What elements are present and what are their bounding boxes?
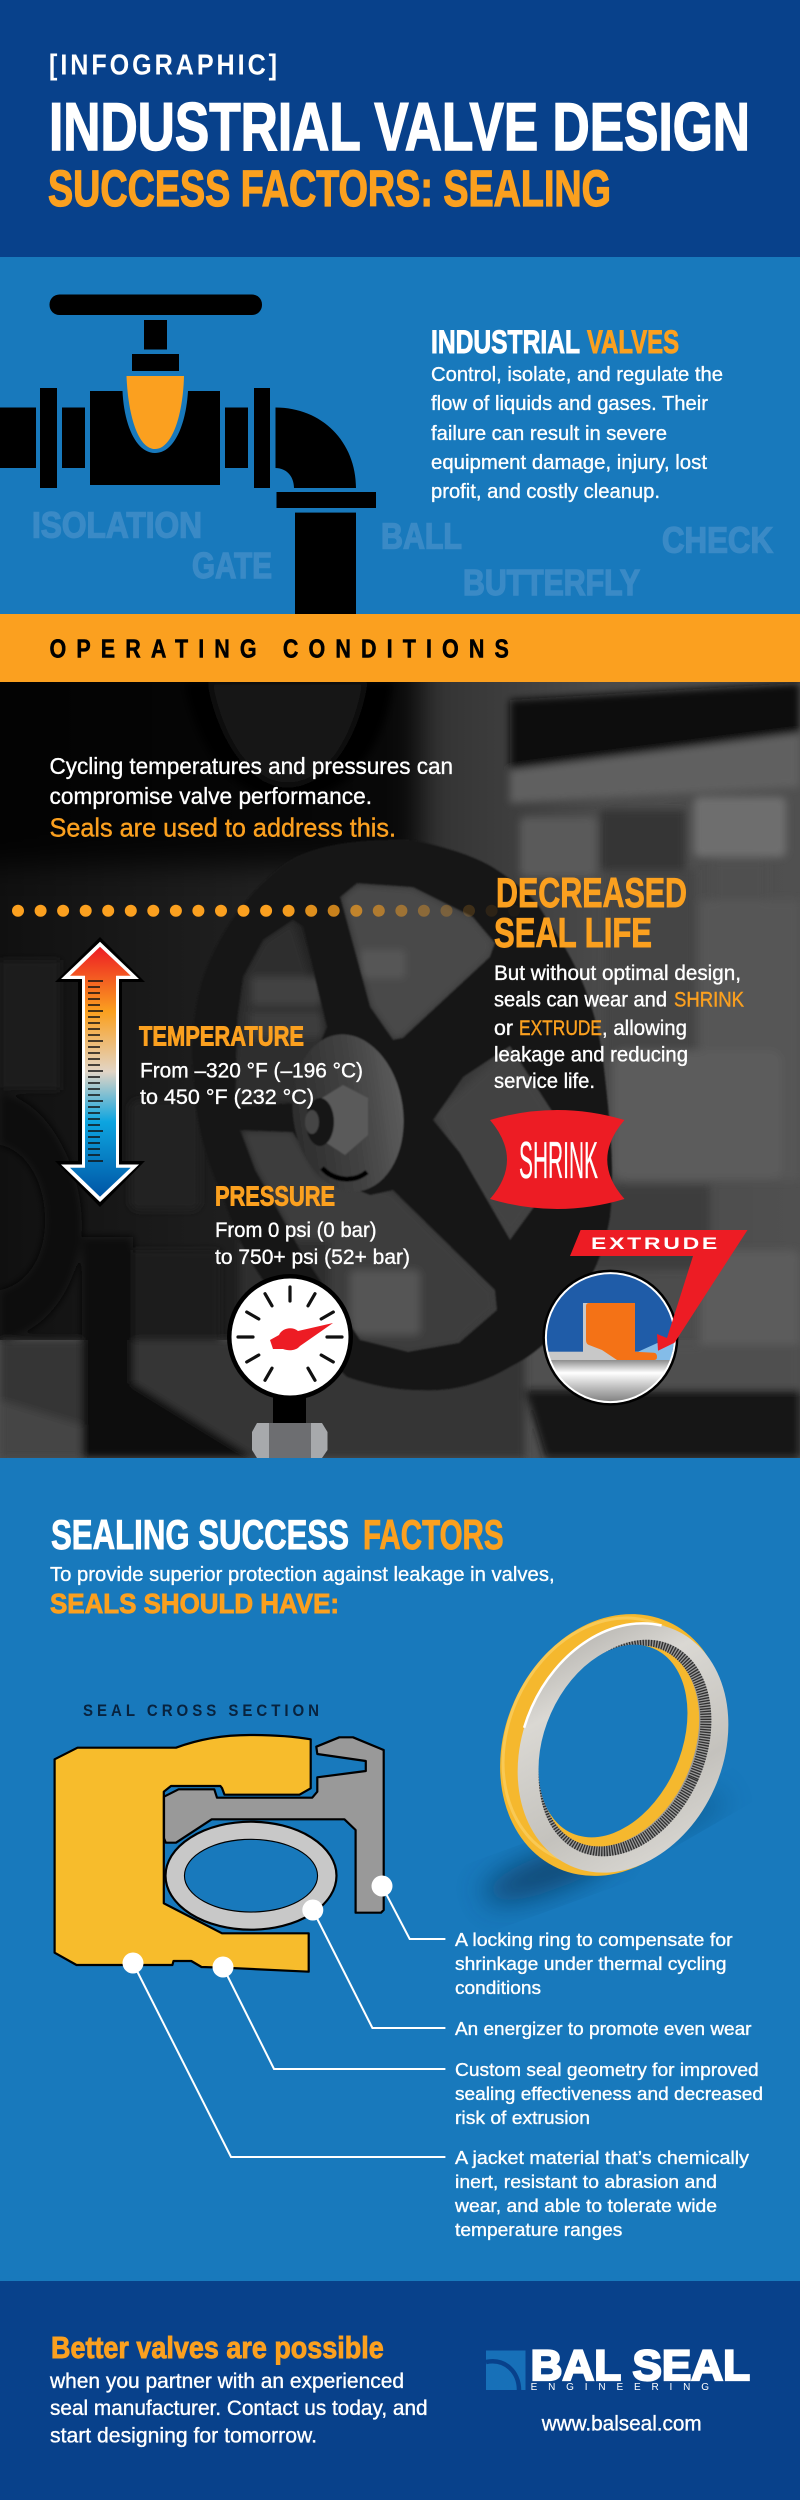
footer text: when you partner with an experienced: [49, 2370, 404, 2393]
panel: operating conditions photo: [0, 650, 800, 1458]
text: pressure: [215, 1180, 410, 1269]
image: seal ring: [459, 1578, 767, 1913]
text: cycling temperatures: compromise valve performance.: [50, 783, 372, 809]
text: seal geometry: risk of extrusion: [455, 2107, 590, 2128]
text: locking ring: conditions: [455, 1977, 541, 1998]
text: pressure: PRESSURE: [215, 1180, 335, 1212]
text: valve description: Control, isolate, and regulate the: [431, 363, 723, 386]
text: decreased seal life description: or: [494, 1017, 513, 1040]
faded valve type words: BALL: [381, 516, 462, 557]
faded valve type words: GATE: [192, 545, 272, 586]
heading: decreased seal life: [494, 869, 687, 956]
heading: decreased seal life: SEAL LIFE: [494, 909, 652, 956]
logo: Bal Seal Engineering: BAL SEAL: [531, 2342, 750, 2390]
top gauge: [209, 692, 306, 787]
heading: sealing success factors: SEALING SUCCESS: [51, 1511, 349, 1558]
text: jacket material: wear, and able to tolerate wide: [454, 2195, 717, 2216]
icon: shrink badge: SHRINK: [519, 1132, 598, 1190]
footer heading: Better valves are possible: [51, 2330, 384, 2365]
heading: seal cross section: SEAL CROSS SECTION: [83, 1701, 323, 1720]
text: seal geometry: sealing effectiveness and decreased: [455, 2083, 763, 2104]
jacket: [55, 1735, 311, 1972]
heading: industrial valves: INDUSTRIAL: [431, 324, 580, 360]
text: temperature: From –320 °F (–196 °C): [140, 1059, 363, 1082]
text: decreased seal life description: [494, 962, 744, 1093]
left background details: [0, 960, 60, 1090]
faded valve type words: CHECK: [662, 520, 773, 561]
logo: Bal Seal Engineering: ENGINEERING: [531, 2382, 718, 2393]
banner: operating conditions: OPERATING CONDITIONS: [50, 636, 519, 664]
hub disc: [292, 1034, 404, 1192]
panel: sealing success factors: [0, 1458, 800, 2281]
locking ring: [164, 1737, 384, 1913]
text: jacket material: [454, 2147, 750, 2240]
text: decreased seal life description: leakage and reducing: [494, 1044, 688, 1067]
text: jacket material: temperature ranges: [455, 2219, 622, 2240]
text: jacket material: inert, resistant to abrasion and: [455, 2171, 717, 2192]
handwheel silhouette: [192, 840, 612, 1390]
icon: black valve with orange plug: [0, 294, 376, 615]
text: pressure: to 750+ psi (52+ bar): [215, 1246, 410, 1269]
text: section intro: [50, 1563, 555, 1619]
subtitle: SUCCESS FACTORS: SEALING: [48, 160, 611, 217]
text: decreased seal life description: seals can wear and: [494, 989, 667, 1012]
text: seal geometry: [455, 2059, 763, 2128]
text: valve description: [431, 363, 723, 503]
icon: shrink badge: [490, 1110, 624, 1209]
text: energizer: An energizer to promote even wear: [455, 2018, 752, 2039]
text: decreased seal life description: EXTRUDE: [519, 1017, 602, 1040]
diagram: seal cross section: [55, 1735, 384, 1972]
panel: footer: [0, 2281, 800, 2500]
footer text: seal manufacturer. Contact us today, and: [50, 2397, 428, 2420]
heading: decreased seal life: DECREASED: [496, 869, 687, 916]
energizer: [166, 1822, 336, 1930]
text: valve description: profit, and costly cleanup.: [431, 480, 660, 503]
text: temperature: [139, 1020, 363, 1109]
text: decreased seal life description: But without optimal design,: [494, 962, 741, 985]
header band: [0, 0, 800, 257]
right side valve body: [510, 683, 800, 770]
text: temperature: TEMPERATURE: [139, 1020, 304, 1052]
text: cycling temperatures: Cycling temperatures and pressures can: [50, 753, 453, 779]
text: jacket material: A jacket material that’s chemically: [455, 2147, 750, 2168]
text: valve description: failure can result in severe: [431, 422, 667, 445]
faded valve type words: [32, 504, 773, 603]
panel: industrial valves: [0, 257, 800, 615]
header kicker: [INFOGRAPHIC]: [49, 50, 280, 82]
footer website: www.balseal.com: [541, 2413, 702, 2436]
faded valve type words: ISOLATION: [32, 504, 202, 546]
text: decreased seal life description: SHRINK: [674, 989, 744, 1012]
text: pressure: From 0 psi (0 bar): [215, 1219, 376, 1242]
text: seal geometry: Custom seal geometry for improved: [455, 2059, 759, 2080]
callout: extrude arrow: [570, 1230, 748, 1351]
floor: [0, 1340, 525, 1458]
text: section intro: SEALS SHOULD HAVE:: [50, 1588, 339, 1619]
text: valve description: flow of liquids and gases. Their: [431, 392, 708, 415]
leader lines and callout dots: [122, 1876, 445, 2157]
footer text: start designing for tomorrow.: [50, 2425, 317, 2448]
text: valve description: equipment damage, injury, lost: [431, 451, 707, 474]
icon: pressure gauge: [227, 1274, 353, 1458]
text: cycling temperatures: [50, 753, 453, 843]
icon: extrude circle: [540, 1270, 680, 1406]
text: decreased seal life description: service life.: [494, 1070, 595, 1093]
text: locking ring: [455, 1929, 733, 1998]
photo background: handwheel and valve: [0, 650, 800, 1458]
callout: extrude arrow: EXTRUDE: [591, 1234, 720, 1253]
text: cycling temperatures: Seals are used to address this.: [50, 813, 396, 843]
text: locking ring: A locking ring to compensate for: [455, 1929, 733, 1950]
footer text: [49, 2370, 428, 2448]
background behind wheel: [340, 883, 495, 1040]
icon: temperature arrow: [55, 937, 145, 1207]
text: section intro: To provide superior protection against leakage in valves,: [50, 1563, 555, 1586]
heading: sealing success factors: FACTORS: [363, 1511, 504, 1558]
text: temperature: to 450 °F (232 °C): [140, 1086, 314, 1109]
faded valve type words: BUTTERFLY: [463, 562, 640, 603]
heading: industrial valves: VALVES: [587, 324, 679, 360]
dotted divider: [12, 905, 520, 917]
text: decreased seal life description: , allowing: [602, 1017, 687, 1040]
text: locking ring: shrinkage under thermal cycling: [455, 1953, 726, 1974]
banner: operating conditions: [0, 614, 800, 682]
